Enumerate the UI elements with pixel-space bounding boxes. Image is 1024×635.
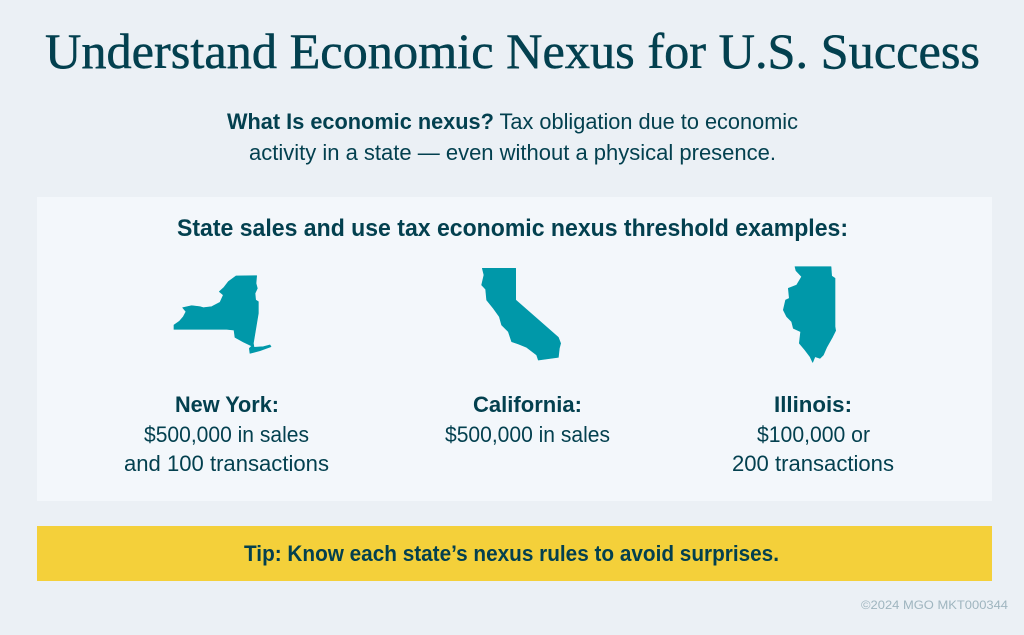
icon: Illinois map: [783, 267, 836, 362]
California thresholds: [445, 392, 610, 447]
panel: threshold examples: [37, 197, 992, 501]
New York thresholds: [124, 392, 329, 476]
New York thresholds: and 100 transactions: [124, 451, 329, 476]
icon: California map: [482, 268, 561, 360]
panel heading: State sales and use tax economic nexus threshold examples:: [177, 215, 848, 242]
California thresholds: California:: [473, 392, 582, 417]
tip banner: Tip: Know each state’s nexus rules to avoid surprises.: [244, 541, 779, 566]
icon: New York map: [174, 276, 271, 353]
Illinois thresholds: $100,000 or: [757, 422, 870, 447]
copyright: ©2024 MGO MKT000344: [861, 598, 1008, 612]
Illinois thresholds: 200 transactions: [732, 451, 894, 476]
tip banner: [37, 526, 992, 581]
title: Understand Economic Nexus for U.S. Success: [45, 23, 980, 79]
California thresholds: $500,000 in sales: [445, 422, 610, 447]
New York thresholds: New York:: [175, 392, 279, 417]
Illinois thresholds: Illinois:: [774, 392, 852, 417]
intro text: What Is economic nexus? Tax obligation due to economic: [227, 109, 798, 134]
New York thresholds: $500,000 in sales: [144, 422, 309, 447]
Illinois thresholds: [732, 392, 894, 476]
intro text: activity in a state — even without a physical presence.: [249, 140, 776, 165]
intro text: [227, 109, 798, 165]
